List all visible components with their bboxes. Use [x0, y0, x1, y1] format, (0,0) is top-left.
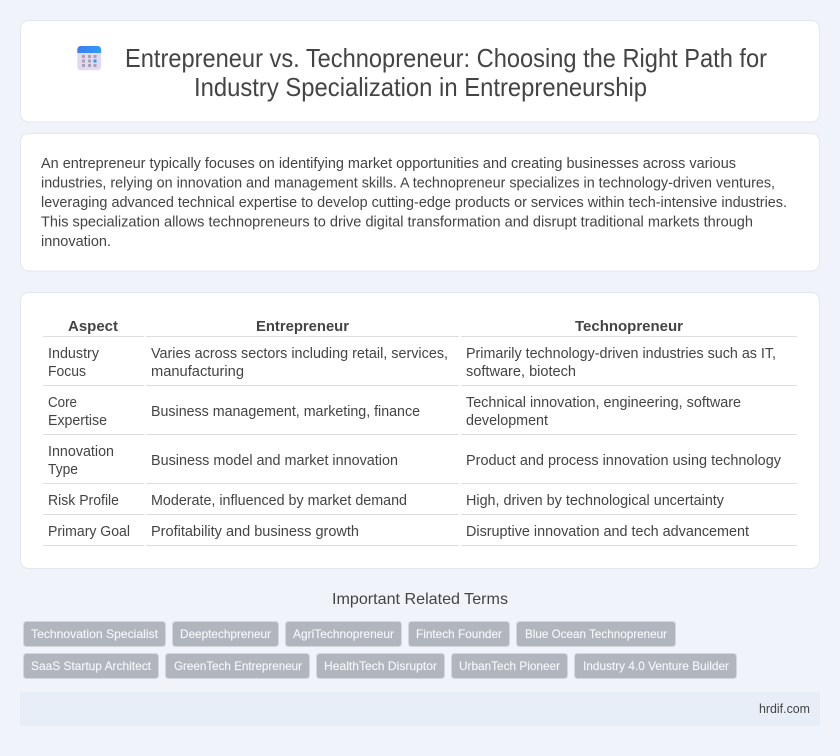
table row: industry focus: Focus [48, 364, 86, 380]
table row: primary goal [48, 524, 749, 540]
table row: primary goal: Profitability and business growth [151, 524, 359, 540]
table row: innovation type [48, 444, 782, 478]
title: Industry Specialization in Entrepreneurship [194, 74, 647, 102]
text block: introduction paragraph: This specialization allows technopreneurs to drive digital transformation and disrupt traditional markets through [41, 214, 753, 230]
tag: SaaS Startup Architect: SaaS Startup Architect [31, 659, 152, 673]
icon: calendar [77, 46, 101, 70]
table row: core expertise: Core [48, 395, 77, 411]
table row: primary goal: Disruptive innovation and tech advancement [466, 524, 749, 540]
tag: Industry 4.0 Venture Builder [574, 654, 736, 678]
panel: introduction [20, 134, 820, 271]
text block: introduction paragraph: innovation. [41, 234, 111, 250]
tag: Fintech Founder [408, 622, 510, 646]
text block: introduction paragraph: industries, relying on innovation and management skills. A technopreneur specializes in technology-driven ventures, [41, 176, 775, 192]
tag: HealthTech Disruptor: HealthTech Disruptor [324, 659, 437, 673]
tag: UrbanTech Pioneer: UrbanTech Pioneer [459, 659, 560, 673]
tag: Blue Ocean Technopreneur [516, 622, 676, 646]
tag: AgriTechnopreneur: AgriTechnopreneur [293, 627, 394, 641]
tag: AgriTechnopreneur [286, 622, 402, 646]
tag: GreenTech Entrepreneur: GreenTech Entrepreneur [174, 659, 302, 673]
tag: Blue Ocean Technopreneur: Blue Ocean Technopreneur [525, 627, 667, 641]
tag: UrbanTech Pioneer [452, 654, 568, 678]
table row: risk profile: High, driven by technological uncertainty [466, 493, 725, 509]
tag: Deeptechpreneur: Deeptechpreneur [180, 627, 271, 641]
table header row: Technopreneur [575, 318, 683, 335]
tag: Industry 4.0 Venture Builder: Industry 4.0 Venture Builder [583, 659, 729, 673]
table row: risk profile: Risk Profile [48, 493, 119, 509]
table row: industry focus: software, biotech [466, 364, 576, 380]
footer [20, 692, 820, 726]
table header row [68, 318, 683, 335]
table row: industry focus: Varies across sectors including retail, services, [151, 346, 448, 362]
table row: innovation type: Innovation [48, 444, 114, 460]
title: Entrepreneur vs. Technopreneur: Choosing the Right Path for [125, 45, 767, 73]
table row: innovation type: Business model and market innovation [151, 453, 398, 469]
table row: industry focus: Primarily technology-driven industries such as IT, [466, 346, 776, 362]
tag: Deeptechpreneur [172, 622, 278, 646]
tag: Technovation Specialist [24, 622, 166, 646]
tag: SaaS Startup Architect [24, 654, 158, 678]
table row: core expertise: development [466, 413, 548, 429]
text block: introduction paragraph: An entrepreneur typically focuses on identifying market opportunities and creating businesses across various [41, 156, 736, 172]
table header row: Entrepreneur [256, 318, 349, 335]
table row: core expertise [48, 395, 741, 429]
table row: risk profile: Moderate, influenced by market demand [151, 493, 407, 509]
footer: hrdif.com [759, 701, 810, 716]
tag: Fintech Founder: Fintech Founder [416, 627, 502, 641]
table row: innovation type: Product and process innovation using technology [466, 453, 782, 469]
table row: core expertise: Technical innovation, engineering, software [466, 395, 741, 411]
text block: introduction paragraph: leveraging advanced technical expertise to develop cutting-edge products or services within tech-intensive industries. [41, 195, 787, 211]
related terms tags [24, 622, 736, 678]
table row: innovation type: Type [48, 462, 78, 478]
table row: core expertise: Business management, marketing, finance [151, 404, 420, 420]
tag: GreenTech Entrepreneur [166, 654, 310, 678]
table row: primary goal: Primary Goal [48, 524, 130, 540]
text block: introduction paragraph [41, 156, 787, 250]
panel: header [20, 20, 820, 122]
table header row: Aspect [68, 318, 118, 335]
table row: industry focus: manufacturing [151, 364, 244, 380]
heading: important related terms: Important Related Terms [332, 591, 508, 608]
table row: industry focus [48, 346, 776, 380]
title [125, 45, 767, 102]
table row: industry focus: Industry [48, 346, 100, 362]
table row: core expertise: Expertise [48, 413, 107, 429]
tag: Technovation Specialist: Technovation Specialist [31, 627, 159, 641]
table row: risk profile [48, 493, 725, 509]
tag: HealthTech Disruptor [316, 654, 444, 678]
panel: comparison table [20, 292, 820, 568]
